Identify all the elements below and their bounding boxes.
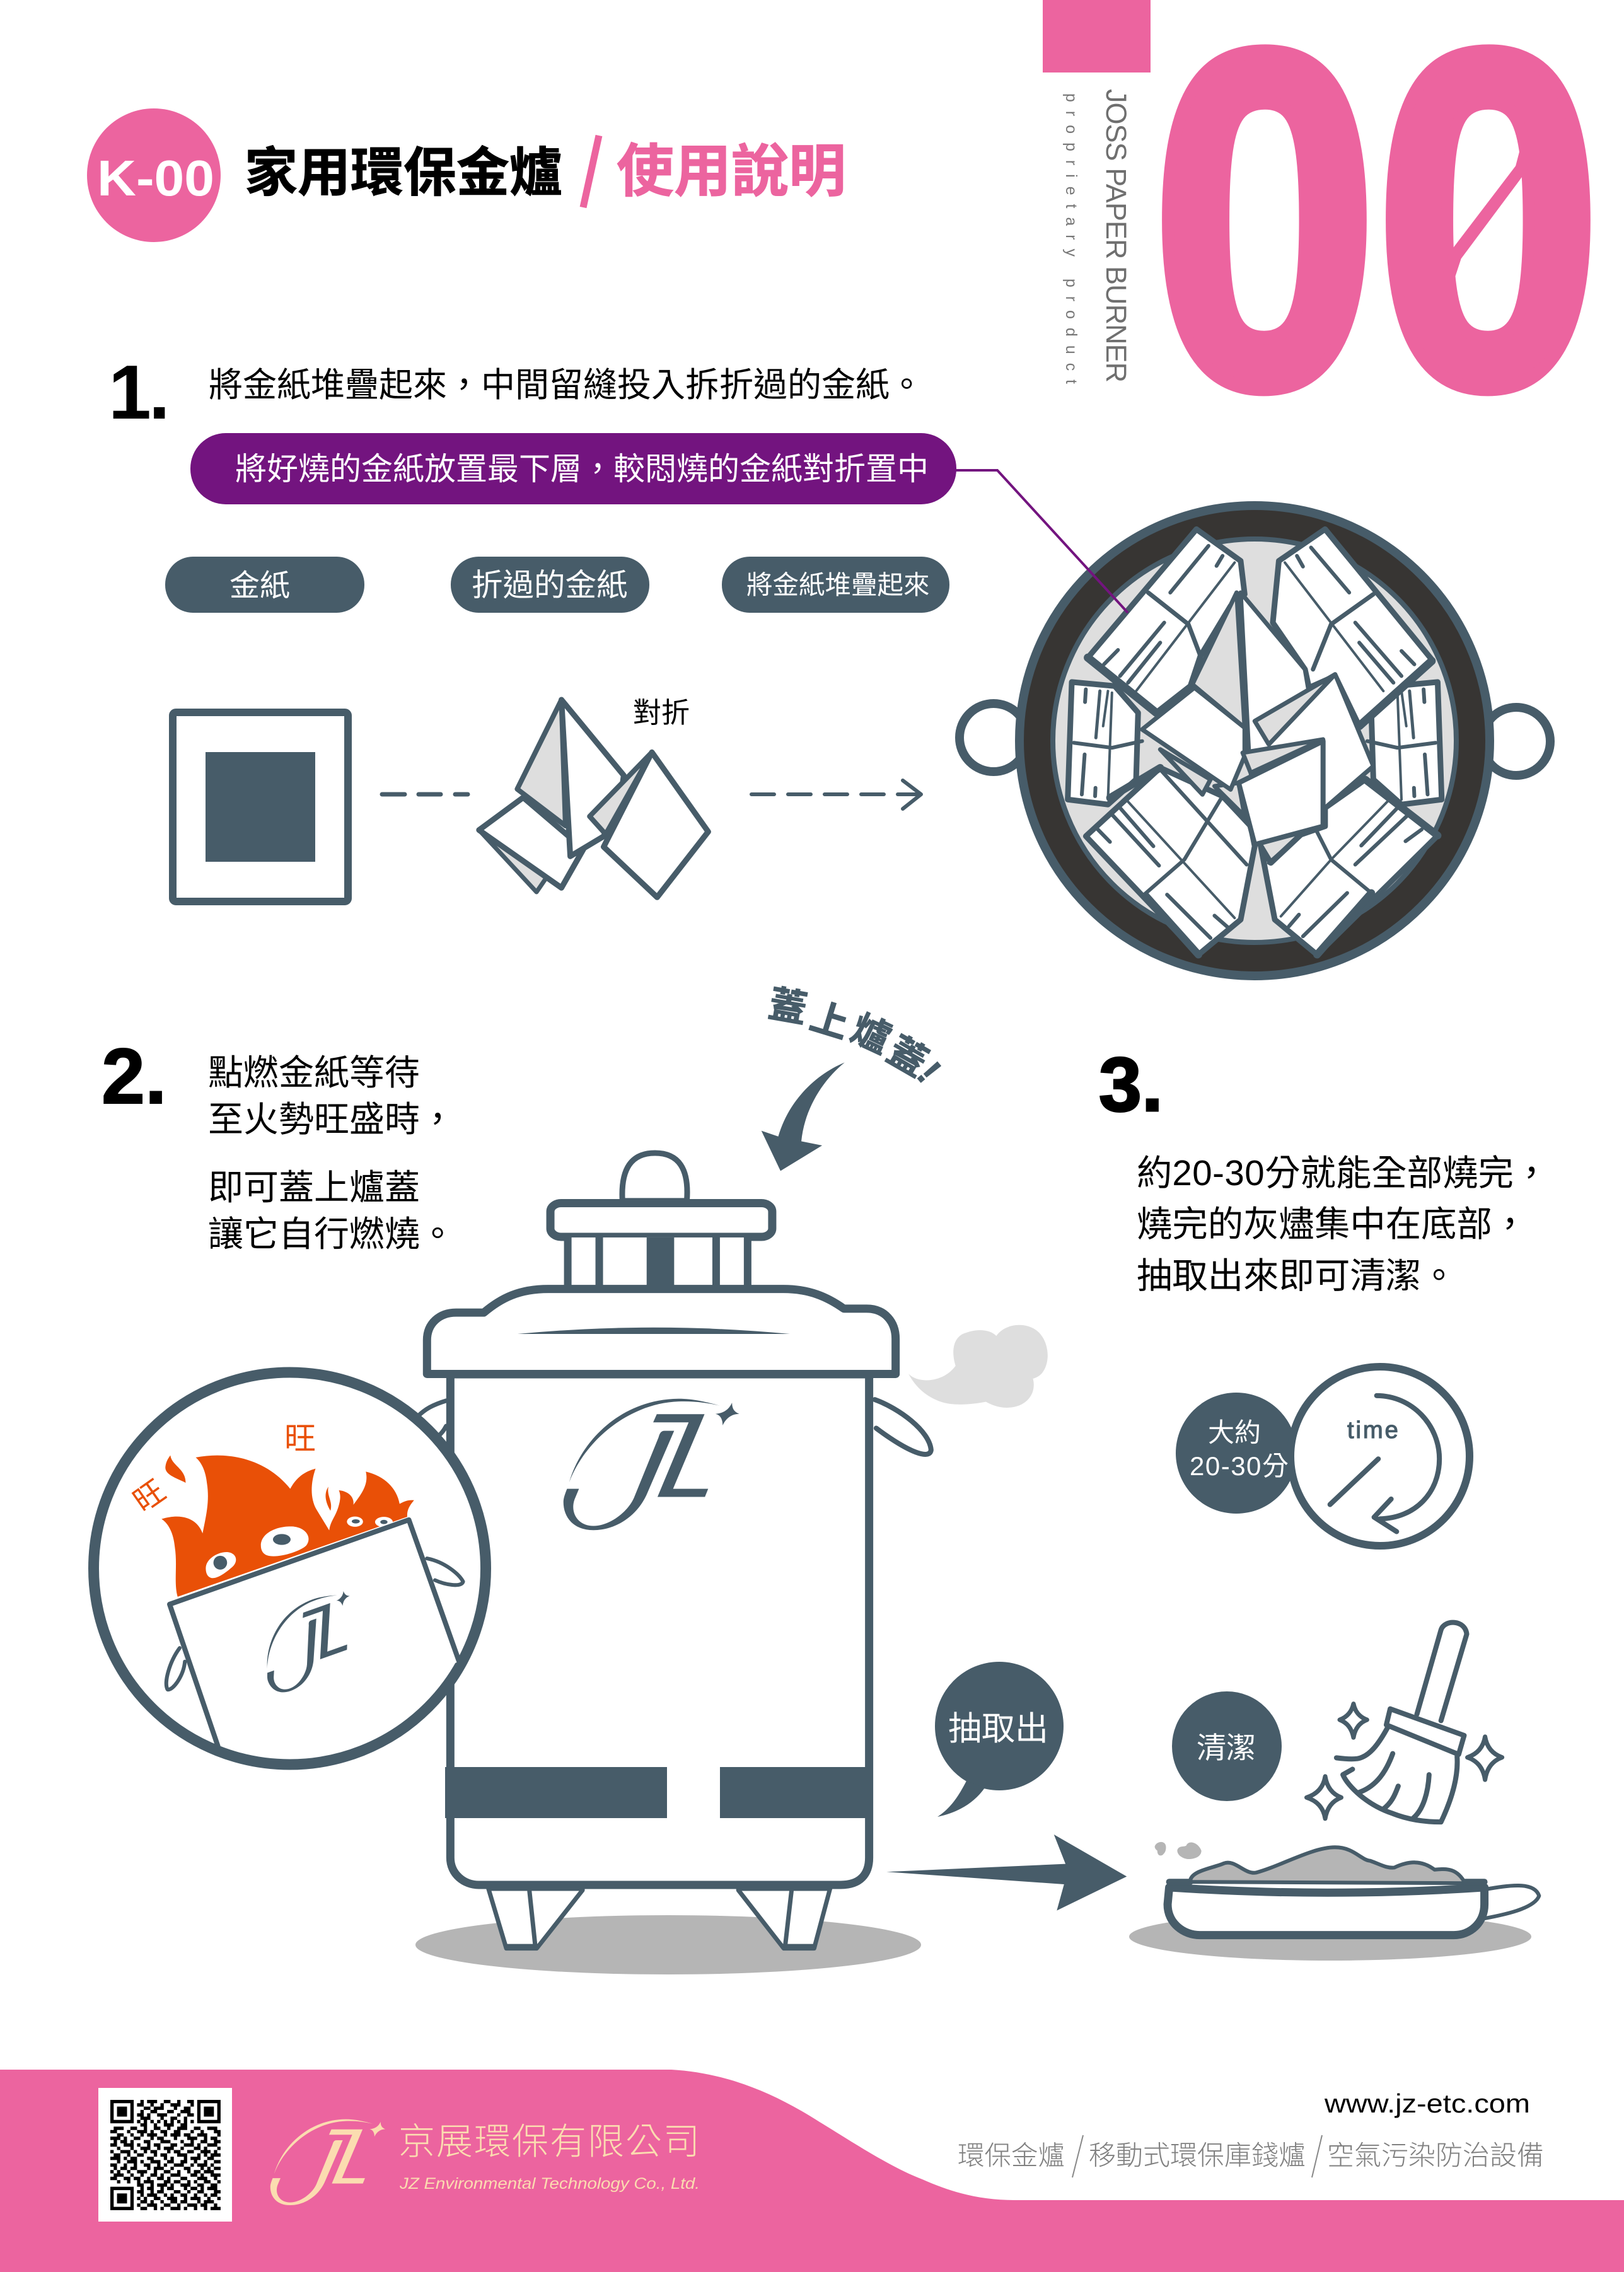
product lines	[958, 2135, 1544, 2177]
model badge K-00	[87, 108, 221, 242]
badge: 清潔: 清潔	[1197, 1731, 1256, 1765]
annotation: 蓋上爐蓋!: !	[909, 1054, 949, 1091]
purple callout pill: 將好燒的金紙放置最下層，較悶燒的金紙對折置中	[235, 451, 929, 487]
badge text: 大約 20-30分: 20-30分	[1190, 1451, 1289, 1481]
inset circle: burning paper flames	[93, 1372, 485, 1765]
step 2 instruction	[208, 1053, 455, 1254]
company name: JZ Environmental Technology Co., Ltd.	[399, 2175, 700, 2193]
step 3 instruction: 燒完的灰燼集中在底部，	[1137, 1204, 1528, 1244]
burner lid	[427, 1153, 896, 1374]
company name	[398, 2121, 700, 2193]
step 3 instruction: 約20-30分就能全部燒完，	[1137, 1153, 1549, 1193]
product lines: 環保金爐	[958, 2142, 1065, 2171]
dashed connector	[382, 792, 468, 797]
step 1 number: 1.	[108, 349, 168, 435]
title: 使用說明	[617, 140, 846, 204]
step 2 instruction: 即可蓋上爐蓋	[208, 1168, 420, 1207]
badge text: 大約 20-30分: 大約	[1208, 1418, 1261, 1447]
icon: joss paper sheet	[173, 712, 348, 901]
label pill: 金紙	[165, 557, 364, 613]
annotation: 蓋上爐蓋!: 爐	[845, 1007, 897, 1061]
step 3 instruction: 抽取出來即可清潔。	[1137, 1256, 1457, 1295]
step 2 instruction: 點燃金紙等待	[208, 1053, 420, 1093]
burner body	[445, 1374, 873, 1885]
pot with stacked joss paper, top view	[960, 506, 1550, 976]
big number 00	[1152, 0, 1601, 486]
annotation: 蓋上爐蓋!: 上	[806, 995, 854, 1046]
floor shadow under burner	[415, 1915, 921, 1974]
step 3 instruction	[1137, 1153, 1549, 1295]
burner side handles	[418, 1400, 931, 1454]
purple callout pill	[190, 433, 956, 504]
label pill: 將金紙堆疊起來: 將金紙堆疊起來	[746, 570, 930, 600]
footer logo	[270, 2119, 385, 2205]
annotation: 蓋上爐蓋!: 蓋	[765, 983, 810, 1031]
QR code	[98, 2088, 232, 2222]
logo on burner	[564, 1399, 740, 1530]
title	[245, 136, 846, 207]
footer band	[0, 2070, 1624, 2272]
label pill: 折過的金紙	[451, 557, 649, 613]
website: www.jz-etc.com	[1324, 2089, 1530, 2118]
vertical label: JOSS PAPER BURNER: JOSS PAPER BURNER	[1100, 89, 1132, 383]
steam puff	[908, 1325, 1048, 1408]
step 1 instruction: 將金紙堆疊起來，中間留縫投入拆折過的金紙。	[209, 366, 924, 404]
dashed arrow	[751, 780, 921, 809]
burner legs	[489, 1889, 830, 1949]
vertical label: proprietary product: proprietary product	[1062, 93, 1080, 384]
inset circle: burning paper flames: 旺	[284, 1421, 316, 1456]
pink corner block	[1043, 0, 1151, 72]
product lines: 移動式環保庫錢爐	[1089, 2141, 1306, 2171]
speech bubble: 抽取出: 抽取出	[948, 1710, 1048, 1747]
product lines: 空氣污染防治設備	[1327, 2141, 1544, 2171]
label pill: 折過的金紙: 折過的金紙	[472, 568, 628, 603]
company name: 京展環保有限公司	[398, 2121, 700, 2162]
step 2 instruction: 讓它自行燃燒。	[208, 1214, 455, 1254]
annotation: 蓋上爐蓋!: 蓋	[881, 1029, 934, 1084]
icon: folded joss paper	[479, 700, 708, 897]
step 2 instruction: 至火勢旺盛時，	[208, 1099, 455, 1139]
curved arrow onto lid	[762, 1062, 845, 1171]
clock icon: time	[1347, 1417, 1400, 1444]
label pill: 金紙: 金紙	[229, 569, 290, 603]
clock icon	[1290, 1367, 1470, 1546]
step 2 number: 2.	[102, 1033, 166, 1120]
annotation: 蓋上爐蓋!	[765, 983, 949, 1091]
big arrow to tray	[886, 1834, 1127, 1911]
badge text: 大約 20-30分	[1190, 1418, 1289, 1481]
badge: 大約 20-30分	[1176, 1393, 1297, 1514]
step 3 number: 3.	[1099, 1041, 1163, 1127]
model badge K-00: K-00	[97, 150, 214, 206]
title: 家用環保金爐	[245, 143, 562, 202]
badge: 清潔	[1172, 1691, 1282, 1801]
label: 對折: 對折	[633, 697, 690, 729]
inset circle: burning paper flames: 旺	[128, 1475, 171, 1519]
label pill: 將金紙堆疊起來	[722, 557, 949, 613]
icon: broom with sparkles	[1306, 1623, 1502, 1822]
leader line from callout to pot	[955, 470, 1128, 613]
ash tray with shadow	[1129, 1842, 1539, 1961]
speech bubble: 抽取出	[935, 1662, 1064, 1817]
